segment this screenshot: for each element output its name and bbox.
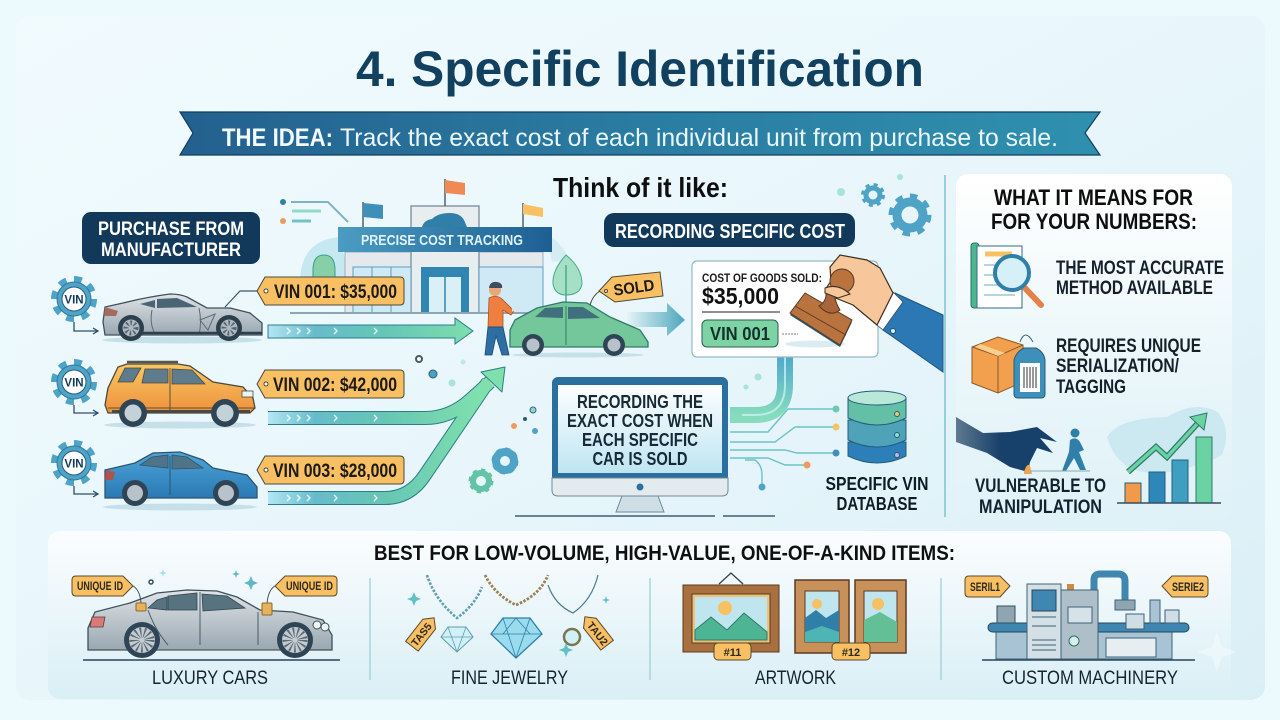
text: serialization: [1056, 336, 1201, 398]
item: luxury cars: [72, 569, 340, 660]
gear: VIN 3: [55, 444, 98, 497]
tag left: UNIQUE ID: [77, 581, 123, 593]
price tag: VIN 003: [257, 456, 404, 484]
icon: box and tag: [972, 335, 1045, 398]
tag right: UNIQUE ID: [286, 581, 333, 593]
label: fine jewelry: FINE JEWELRY: [451, 668, 568, 689]
tag: TAS5: [406, 613, 440, 651]
car: orange SUV: [104, 362, 256, 428]
monitor: CAR IS SOLD: [592, 448, 688, 469]
panel heading: [991, 185, 1197, 234]
panel heading: FOR YOUR NUMBERS:: [991, 209, 1197, 234]
card: cost of goods sold: COST OF GOODS SOLD:: [702, 271, 822, 285]
text: vulnerable: VULNERABLE TO: [975, 476, 1106, 497]
vertical divider: [944, 175, 946, 517]
tag: TAU2: [579, 612, 613, 650]
label: custom machinery: CUSTOM MACHINERY: [1002, 668, 1178, 689]
label: luxury cars: LUXURY CARS: [152, 668, 268, 689]
banner: the idea: THE IDEA:: [222, 124, 333, 152]
text: most accurate: METHOD AVAILABLE: [1056, 278, 1213, 299]
arrow: sold car to card: [627, 303, 685, 336]
panel heading: WHAT IT MEANS FOR: [994, 185, 1193, 210]
sparkles: [407, 592, 610, 676]
decorative tech lines: [280, 199, 348, 224]
text: most accurate: THE MOST ACCURATE: [1056, 258, 1224, 279]
item: artwork: [683, 573, 906, 660]
label: specific VIN database: DATABASE: [836, 493, 918, 514]
title: 4. Specific Identification: [356, 41, 924, 97]
sold car: green: [510, 302, 648, 358]
text: vulnerable: [975, 476, 1106, 518]
gear: VIN 1: [55, 280, 98, 334]
card: cost of goods sold: $35,000: [702, 283, 779, 309]
text: most accurate: [1056, 258, 1224, 299]
gear: VIN 2: [55, 363, 98, 416]
badge: purchase from manufacturer: PURCHASE FROM: [98, 219, 244, 240]
text: serialization: SERIALIZATION/: [1056, 356, 1180, 377]
person handing keys: [485, 282, 520, 355]
circuit lines to database: [730, 406, 840, 490]
stamp and hand: [790, 255, 943, 372]
tag right: [275, 576, 337, 596]
badge: recording specific cost: RECORDING SPECIFIC COST: [615, 221, 845, 243]
text: vulnerable: MANIPULATION: [979, 497, 1102, 518]
sparkle watermark: [1197, 632, 1237, 672]
tag: SERIL1: SERIL1: [970, 582, 1000, 594]
tree right of dealership: [553, 255, 582, 305]
car: grey sports: [102, 291, 262, 344]
price tag: VIN 003: VIN 003: $28,000: [273, 461, 397, 482]
text: serialization: REQUIRES UNIQUE: [1056, 336, 1201, 357]
monitor: [515, 377, 775, 516]
icon: manipulating hand and figure: [956, 417, 1090, 474]
gear: VIN 2: VIN: [64, 378, 84, 390]
text: serialization: TAGGING: [1056, 377, 1126, 398]
tag left: [72, 576, 133, 596]
banner: the idea: [180, 112, 1100, 155]
sparkles: [149, 569, 258, 590]
card: cost of goods sold: VIN 001: [710, 324, 770, 344]
badge: purchase from manufacturer: [82, 212, 260, 264]
tag: SERIE2: [1162, 576, 1208, 597]
car: blue sedan: [103, 452, 257, 510]
gear: VIN 3: VIN: [64, 458, 84, 470]
gear: VIN 1: VIN: [64, 294, 84, 306]
price tag: VIN 002: VIN 002: $42,000: [273, 375, 397, 396]
banner: the idea: Track the exact cost of each individual unit from purchase to sale.: [340, 124, 1058, 152]
database icon: [848, 391, 906, 463]
column dividers: [370, 578, 941, 680]
price tag: VIN 001: [257, 277, 404, 305]
chart: rising bars and arrow: [1107, 407, 1226, 503]
tag: TAU2: TAU2: [584, 620, 610, 648]
flow arrow 1: [268, 318, 473, 344]
panel: what it means for your numbers: [956, 174, 1232, 520]
tag: TAS5: TAS5: [409, 621, 435, 649]
badge: recording specific cost: [604, 213, 855, 247]
item: custom machinery: [965, 574, 1208, 660]
monitor: EXACT COST WHEN: [567, 410, 713, 431]
label: specific VIN database: [826, 473, 928, 514]
dealership building: [290, 179, 570, 313]
card: cost of goods sold: [692, 261, 878, 357]
tag: sold: [590, 272, 663, 305]
price tag: VIN 002: [257, 370, 404, 398]
tag: #11: #11: [724, 647, 741, 659]
item: fine jewelry: [406, 575, 613, 676]
monitor: EACH SPECIFIC: [582, 429, 698, 450]
tag: #12: [832, 643, 870, 660]
icon: book and magnifier: [971, 243, 1041, 308]
badge: purchase from manufacturer: MANUFACTURER: [101, 240, 241, 261]
tag: sold: SOLD: [613, 277, 656, 300]
tag: #12: #12: [842, 647, 860, 659]
price tag: VIN 001: VIN 001: $35,000: [274, 282, 397, 303]
label: specific VIN database: SPECIFIC VIN: [826, 473, 928, 494]
pipe from card to monitor: [730, 356, 785, 415]
dealership building: PRECISE COST TRACKING: [361, 232, 523, 249]
gears top right: [837, 174, 928, 233]
panel heading: BEST FOR LOW-VOLUME, HIGH-VALUE, ONE-OF-A-KIND ITEMS:: [374, 542, 955, 565]
think of it like heading: Think of it like:: [553, 172, 728, 203]
small dots and gears, middle: [416, 356, 762, 492]
flow arrows 2 and 3 merging: [268, 367, 505, 501]
panel: best for: [48, 531, 1231, 699]
tag: SERIL1: [965, 576, 1010, 597]
tag: SERIE2: SERIE2: [1172, 582, 1204, 594]
tag: #11: [714, 643, 751, 660]
label: artwork: ARTWORK: [755, 668, 836, 689]
monitor: RECORDING THE: [577, 391, 703, 412]
